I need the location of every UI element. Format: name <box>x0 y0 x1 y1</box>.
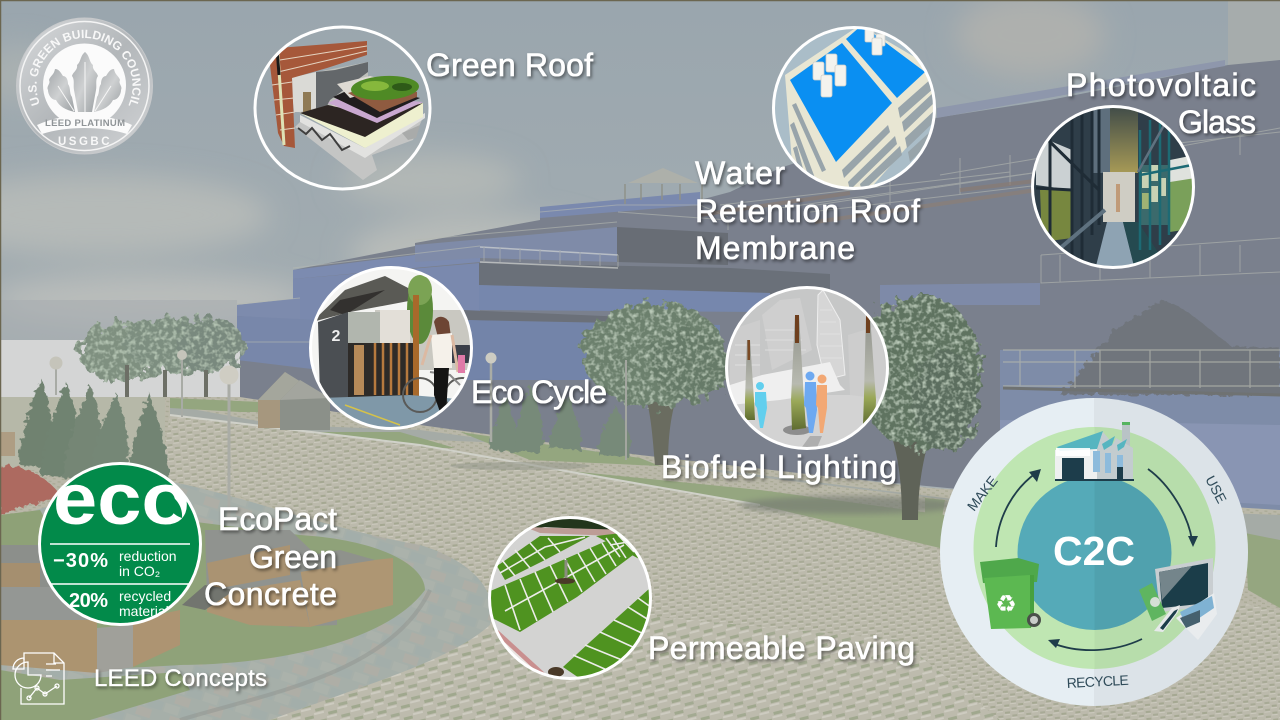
panel: green roof <box>255 27 593 189</box>
rooftop units <box>813 28 885 97</box>
panel: ecopact green concrete: 20% <box>69 590 108 612</box>
hut <box>258 372 308 428</box>
label: EcoPact <box>218 501 337 537</box>
cycle labels: MAKE <box>964 473 1001 514</box>
far tree silhouette <box>1060 300 1280 395</box>
icon: factory <box>1055 422 1134 481</box>
label: Retention Roof <box>695 193 920 229</box>
footer: LEED Concepts <box>13 653 267 704</box>
label <box>204 501 337 612</box>
panel: ecopact green concrete: −30% <box>53 550 108 572</box>
main trees <box>640 385 680 465</box>
icon: devices <box>1139 558 1217 640</box>
railings <box>237 128 1280 342</box>
logo: LEED Platinum badge <box>16 18 153 154</box>
road + lawns <box>170 405 1280 540</box>
conifers <box>20 378 168 480</box>
chart: cradle to cradle cycle <box>940 398 1248 706</box>
panel: ecopact green concrete: reduction <box>119 548 177 564</box>
building <box>237 0 1280 520</box>
leaf emblem <box>48 52 121 112</box>
label: Eco Cycle <box>471 374 607 410</box>
arrows <box>996 469 1192 650</box>
logo: LEED Platinum badge: LEED PLATINUM <box>45 118 125 129</box>
icon: report document <box>13 653 64 704</box>
panel: ecopact green concrete: recycled <box>119 588 171 604</box>
label: Green Roof <box>426 47 593 83</box>
label: Green <box>249 539 337 575</box>
distant trees <box>78 317 244 382</box>
label: Glass <box>1178 104 1256 140</box>
panel: biofuel lighting <box>661 285 897 485</box>
label <box>695 155 920 266</box>
label: Permeable Paving <box>648 630 915 666</box>
icon: leaf in logo <box>174 498 182 518</box>
panel: permeable paving <box>485 515 915 685</box>
icon: recycling bin <box>980 558 1041 629</box>
panel: eco cycle <box>305 264 607 440</box>
grass strips <box>497 536 590 580</box>
roof section illustration <box>270 41 425 180</box>
lawn left <box>0 510 60 575</box>
label: Water <box>695 155 785 191</box>
pale horizon left <box>0 340 240 398</box>
label <box>1066 67 1256 140</box>
ribbon <box>37 115 132 134</box>
label: Biofuel Lighting <box>661 449 897 485</box>
planters <box>0 530 393 673</box>
panel: ecopact green concrete: in CO₂ <box>119 563 160 579</box>
panel: ecopact green concrete: eco <box>53 460 190 540</box>
label: Membrane <box>695 230 855 266</box>
logo: LEED Platinum badge: U.S. GREEN BUILDING COUNCIL <box>28 30 141 106</box>
cycle labels <box>964 473 1230 691</box>
roof pavilion <box>628 168 698 183</box>
panel: ecopact green concrete <box>38 460 337 628</box>
label: Concrete <box>204 576 337 612</box>
ground base <box>0 397 1280 720</box>
footer: LEED Concepts: LEED Concepts <box>94 665 267 692</box>
windows <box>790 78 936 192</box>
panel: photovoltaic glass <box>1030 67 1256 271</box>
stone plaza <box>0 478 492 720</box>
cycle labels: RECYCLE <box>1066 672 1129 691</box>
logo: LEED Platinum badge: USGBC <box>58 136 112 148</box>
icon: recycling bin: ♻ <box>995 591 1017 618</box>
panel: ecopact green concrete: material <box>119 603 169 619</box>
label: Photovoltaic <box>1066 67 1256 103</box>
flower bed <box>0 466 62 515</box>
panel: water retention roof membrane <box>695 24 940 266</box>
cycle labels: USE <box>1202 473 1230 506</box>
lamp posts <box>50 350 626 520</box>
clouds <box>0 0 1105 326</box>
figures <box>755 382 767 428</box>
chart: cradle to cradle cycle: C2C <box>1053 528 1135 574</box>
panel: eco cycle: 2 <box>332 328 341 345</box>
